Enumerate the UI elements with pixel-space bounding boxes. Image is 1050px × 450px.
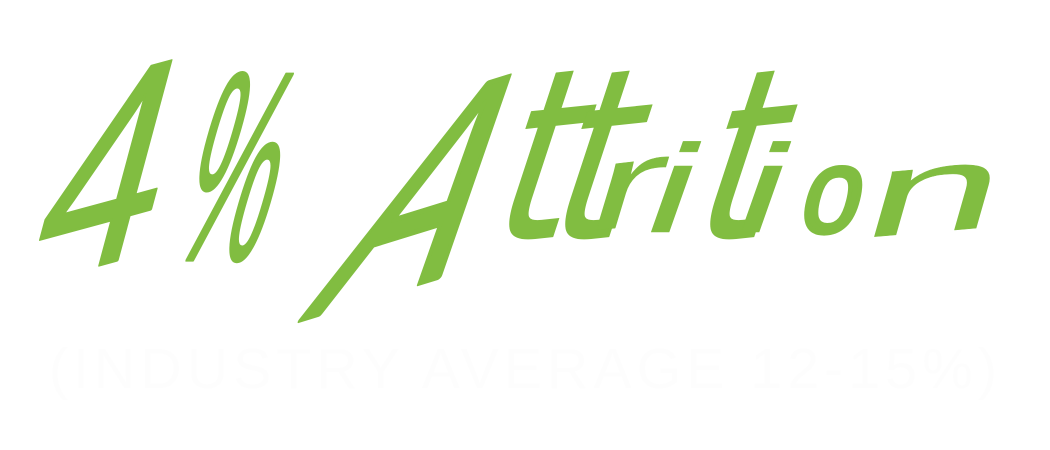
title: 4% Attrition: t [520, 13, 687, 301]
title: 4% Attrition: r [574, 111, 686, 259]
title: 4% Attrition: A [260, 0, 608, 388]
subtitle: industry average, near-white: (INDUSTRY AVERAGE 12-15%) [49, 337, 997, 401]
title: 4% Attrition: i [629, 119, 722, 259]
title: 4% Attrition: i [719, 119, 812, 259]
title: 4% Attrition: t [665, 13, 832, 301]
title: 4% Attrition: 4 [6, 0, 216, 348]
title: 4% Attrition: n [851, 115, 1023, 264]
title: 4% Attrition: o [789, 124, 881, 258]
title: 4% Attrition: % [151, 16, 328, 318]
title: 4% Attrition: t [464, 13, 631, 301]
